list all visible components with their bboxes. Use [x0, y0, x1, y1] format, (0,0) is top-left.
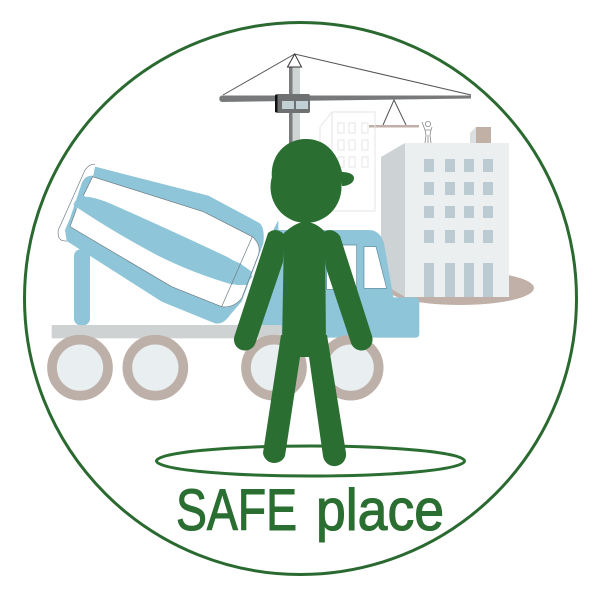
- title: SAFE: [176, 478, 297, 543]
- legs: [263, 335, 346, 466]
- drum support: [74, 249, 90, 325]
- worker figure: [234, 139, 373, 466]
- tower crane: [219, 54, 471, 177]
- concrete mixer truck: [52, 220, 419, 396]
- truck wheels: [52, 340, 379, 396]
- title: [176, 478, 444, 543]
- background building outline: [320, 112, 375, 211]
- hard hat: [272, 139, 354, 186]
- mixer drum: [58, 164, 264, 324]
- truck cab: [227, 220, 419, 338]
- building windows: [424, 159, 493, 297]
- main building: [381, 127, 509, 297]
- ground ring: [156, 446, 464, 476]
- left arm: [234, 230, 285, 351]
- right arm: [322, 230, 373, 351]
- small worker on roof: [422, 121, 432, 143]
- title: place: [316, 478, 444, 543]
- truck chassis: [52, 325, 282, 338]
- torso: [282, 222, 326, 345]
- head: [270, 151, 342, 223]
- building ground shadow: [386, 271, 534, 305]
- roof box: [470, 127, 491, 143]
